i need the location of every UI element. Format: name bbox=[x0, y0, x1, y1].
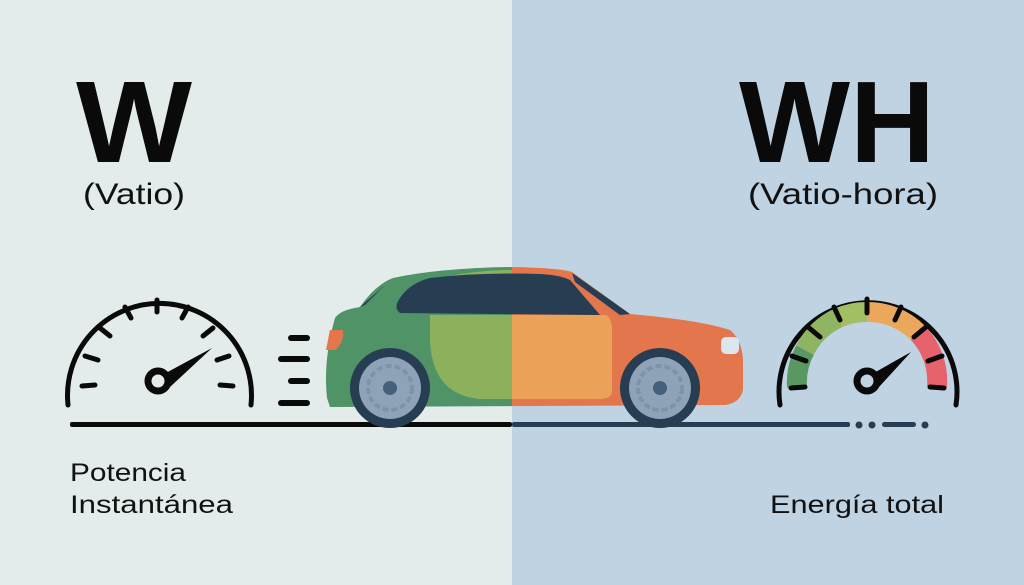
light door panels bbox=[430, 315, 512, 399]
title: WH: WH bbox=[739, 57, 935, 187]
panel: left background bbox=[0, 0, 512, 585]
tail light bbox=[326, 330, 343, 350]
ground line right bbox=[512, 422, 928, 428]
icon: right colored speedometer bbox=[779, 299, 957, 405]
subtitle: Vatio-hora: (Vatio-hora) bbox=[748, 178, 938, 211]
icon: left speedometer bbox=[68, 300, 252, 405]
subtitle: Vatio: (Vatio) bbox=[83, 178, 185, 211]
ground line left bbox=[70, 422, 512, 427]
panel: right background bbox=[512, 0, 1024, 585]
window bbox=[396, 274, 600, 315]
head light bbox=[721, 337, 739, 354]
title: W: W bbox=[76, 57, 193, 187]
wheels bbox=[350, 348, 700, 428]
label: Potencia Instantánea bbox=[70, 459, 233, 519]
label: Energía total: Energía total bbox=[770, 491, 944, 519]
label: Potencia Instantánea: Potencia bbox=[70, 459, 186, 487]
illustration: car bbox=[326, 267, 743, 428]
label: Potencia Instantánea: Instantánea bbox=[70, 491, 233, 519]
icon: speed lines bbox=[281, 338, 307, 403]
